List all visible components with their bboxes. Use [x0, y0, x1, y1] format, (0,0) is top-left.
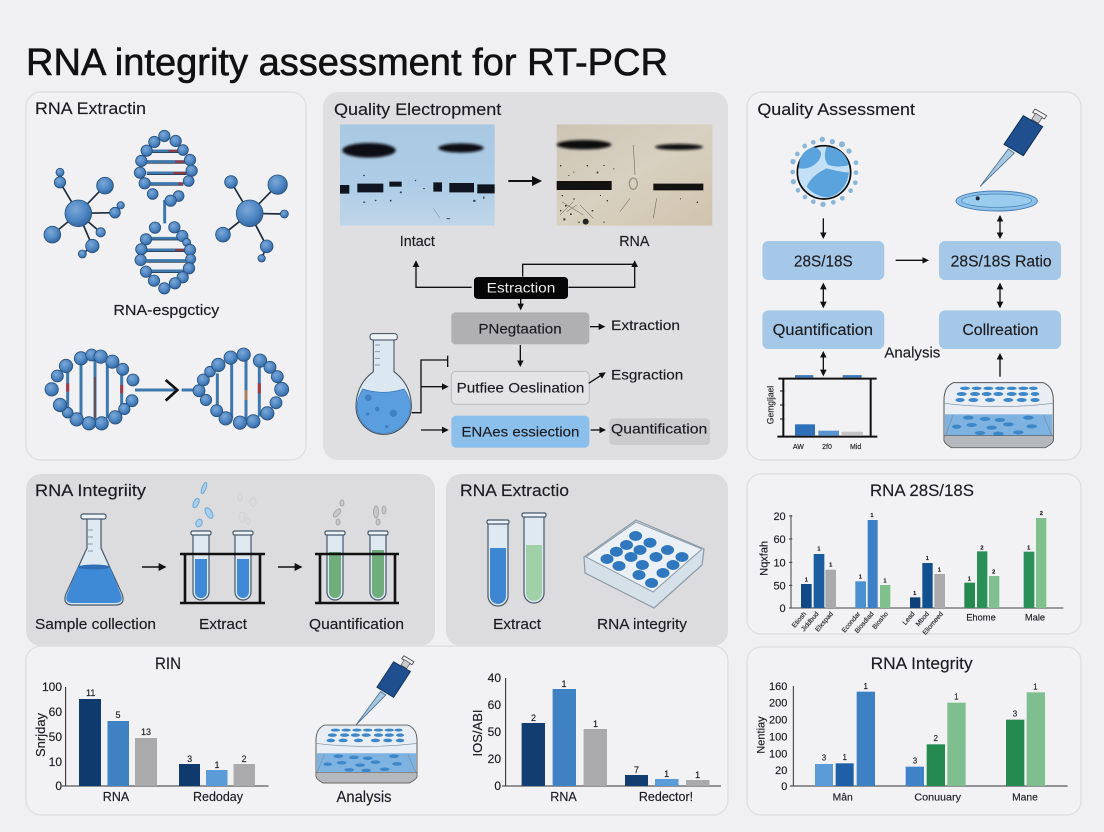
icon: vertical double helix [134, 130, 197, 294]
right bar chart: 2 [531, 713, 536, 723]
right bar chart: 7 [634, 765, 639, 775]
rotated category labels: Eliomeed [922, 611, 945, 637]
left bar chart [33, 680, 268, 804]
panel content [757, 100, 1061, 451]
y tick labels: 20 [773, 511, 786, 523]
icon: conical flask [65, 514, 123, 605]
bars [801, 518, 1046, 608]
icon: blue test tube [487, 520, 509, 606]
bar value labels: 1 [926, 556, 929, 562]
RIN heading: RIN [155, 654, 181, 673]
label: extraction: Extraction [611, 317, 680, 333]
arrow [998, 354, 1002, 377]
rotated category labels: Lead [902, 611, 917, 627]
y tick labels: 200 [769, 715, 787, 727]
arrow: extraction to RNA [523, 262, 635, 287]
box: quantification: Quantification [773, 322, 873, 339]
panel content [334, 100, 712, 448]
panel: RIN charts and analysis [26, 646, 728, 815]
label: quantification [609, 418, 710, 445]
left bar chart: Snrjday [33, 712, 48, 757]
left bar chart: 10 [49, 755, 62, 769]
bar value labels: 2 [1040, 511, 1043, 517]
tan gel image [557, 124, 712, 226]
rotated category labels: Elxspad [814, 611, 835, 633]
arrow: cell to ratio box [821, 218, 825, 238]
small bar chart: Mid [850, 444, 861, 451]
arrow [518, 345, 522, 366]
bar chart [755, 654, 1068, 803]
bar value labels: 2 [980, 545, 984, 551]
bar value labels: 1 [1027, 545, 1030, 551]
right bar chart: 1 [695, 770, 700, 780]
y tick labels: 100 [769, 732, 787, 744]
box: negotiation [451, 312, 589, 344]
rotated category labels: Biosdiad [854, 611, 876, 635]
small bar chart: AW [793, 444, 804, 451]
icon: right horizontal helix [193, 348, 289, 429]
arrow [589, 373, 605, 383]
panel: RNA integrity workflow [26, 474, 435, 646]
box: negotiation: PNegtaation [478, 320, 562, 336]
y tick labels: 60 [773, 534, 786, 546]
panel heading: Quality Assessment [757, 100, 915, 119]
small bar chart: 2f0 [822, 444, 832, 451]
icon: dish [956, 191, 1037, 211]
label: RNA: RNA [619, 234, 650, 250]
left bar chart: RNA [103, 790, 130, 804]
box: purification: Putfiee Oeslination [457, 379, 584, 395]
panel: RNA 28S/18S chart [747, 474, 1081, 637]
box: quantification [762, 310, 884, 349]
chart title: RNA Integrity [871, 654, 973, 673]
chart title: RNA 28S/18S [870, 481, 974, 500]
panel heading: RNA Extractin [35, 99, 146, 118]
icon: right molecule [216, 175, 288, 262]
icon: rack with green tubes [315, 500, 399, 603]
bar value labels: 3 [822, 754, 827, 763]
arrow [821, 352, 825, 375]
left bar chart: 50 [49, 730, 62, 744]
left bar chart: Redoday [193, 790, 244, 804]
bar value labels: 2 [992, 569, 995, 575]
icon: left molecule [44, 168, 124, 258]
rotated category labels [791, 610, 945, 637]
bar value labels: 1 [863, 682, 868, 691]
axes [790, 686, 1068, 786]
label: extract: Extract [493, 616, 542, 633]
bar chart: Mane [1012, 792, 1038, 803]
box: correlation: Collreation [962, 322, 1038, 339]
icon: sample tray [944, 383, 1053, 448]
right bar chart: RNA [550, 790, 577, 804]
icon: sample tray [316, 725, 417, 783]
bars [815, 692, 1045, 786]
bar chart [759, 481, 1063, 637]
y tick labels [773, 511, 786, 615]
y tick labels [769, 681, 787, 793]
icon: cell [790, 137, 858, 207]
arrow: dish to ratio box [998, 216, 1002, 238]
box: 28S/18S: 28S/18S [794, 254, 853, 271]
label: analysis: Analysis [884, 346, 940, 362]
label: extract: Extract [199, 616, 248, 633]
bar value labels: 1 [968, 577, 971, 583]
caption: RNA-espgcticy [113, 302, 220, 319]
bar chart: Male [1025, 613, 1045, 623]
right bar chart: 40 [488, 671, 501, 685]
small bar chart [765, 376, 877, 451]
connector: flask to boxes [412, 356, 448, 430]
y tick labels: 100 [769, 748, 787, 760]
left bar chart: 0 [55, 779, 62, 793]
left bar chart: 1 [214, 760, 220, 770]
bar value labels: 1 [829, 563, 832, 569]
right bar chart: 1 [561, 679, 567, 689]
right bar chart: IOS/ABI [470, 710, 485, 756]
left bar chart: 2 [241, 754, 247, 764]
category labels: Mân [833, 792, 853, 803]
arrow [896, 258, 928, 262]
left bar chart: 100 [42, 680, 62, 694]
left bar chart: 5 [115, 710, 121, 720]
bar value labels: 1 [1033, 683, 1038, 692]
label: quantification: Quantification [611, 420, 707, 436]
arrow [591, 428, 605, 432]
y axis label: Nentiay [755, 716, 767, 754]
label: RNA integrity: RNA integrity [597, 616, 687, 633]
right bar chart: 60 [488, 698, 501, 712]
left bar chart: 11 [86, 688, 95, 698]
rotated category labels: Econdar [841, 610, 863, 634]
box: purification [451, 371, 589, 404]
rotated category labels: Jiddbud [800, 611, 821, 633]
box: enzyme selection [451, 416, 589, 448]
label: esgraction: Esgraction [611, 367, 683, 383]
panel: quality electrophoresis [323, 92, 728, 460]
right bar chart: 1 [593, 719, 598, 729]
panel: RNA integrity chart [747, 647, 1081, 815]
box: correlation [939, 310, 1061, 349]
bar value labels [805, 511, 1043, 597]
y tick labels: 20 [775, 765, 787, 777]
label: analysis: Analysis [336, 789, 392, 806]
left bar chart: 13 [141, 727, 151, 737]
y tick labels: 160 [769, 681, 787, 693]
box: extraction: Estraction [487, 279, 555, 295]
right bar chart: 20 [488, 752, 501, 766]
arrow: helix transition [135, 380, 195, 401]
small bar chart: Gemgljael [765, 386, 775, 424]
arrow: gel comparison [508, 178, 540, 184]
arrow [821, 284, 825, 307]
rotated category labels: Biosho [871, 611, 890, 631]
arrow [998, 284, 1002, 307]
icon: green test tube [522, 513, 546, 603]
arrow [519, 299, 523, 309]
icon: well plate [584, 520, 704, 608]
right bar chart: 1 [664, 769, 669, 779]
bar value labels: 3 [1013, 710, 1018, 719]
box: 28S/18S ratio: 28S/18S Ratio [951, 254, 1052, 271]
box: 28S/18S [762, 241, 884, 280]
y tick labels: 0 [780, 603, 786, 615]
category labels: Ehome [966, 613, 996, 623]
panel: RNA extraction tubes [446, 474, 728, 646]
bar value labels: 1 [817, 547, 821, 553]
left bar chart: 3 [187, 754, 192, 764]
bar value labels: 1 [954, 693, 959, 702]
y tick labels: 200 [769, 698, 787, 710]
label: sample collection: Sample collection [35, 616, 156, 633]
panel heading: Quality Electropment [334, 100, 502, 119]
bar value labels: 1 [859, 575, 862, 581]
title: RNA integrity assessment for RT-PCR [26, 42, 668, 84]
bar value labels: 1 [938, 567, 941, 573]
bar value labels: 3 [913, 756, 918, 765]
right bar chart [470, 671, 721, 804]
y tick labels: 10 [773, 557, 786, 569]
bar value labels [822, 682, 1038, 765]
right bar chart: 50 [488, 725, 501, 739]
panel: quality assessment [747, 92, 1081, 460]
y tick labels: 0 [781, 781, 787, 793]
box: extraction [474, 277, 568, 299]
icon: rack with blue tubes [180, 482, 265, 603]
axes [789, 515, 1063, 608]
panel heading: RNA Integriity [35, 481, 147, 500]
left bar chart: 60 [49, 705, 62, 719]
arrow: extraction to intact [416, 262, 472, 287]
bar chart: Conuuary [914, 792, 962, 803]
arrow [278, 566, 301, 568]
bar value labels: 1 [883, 578, 887, 584]
bar value labels: 1 [913, 591, 916, 597]
icon: round flask [356, 334, 411, 434]
box: enzyme selection: ENAes essiection [461, 424, 579, 440]
arrow [142, 566, 165, 568]
icon: left horizontal helix [45, 349, 139, 430]
blue gel image [340, 124, 495, 226]
right bar chart: 0 [494, 779, 501, 793]
icon: pipette [356, 656, 414, 725]
label: quantification: Quantification [309, 616, 404, 633]
panel: RNA extraction [26, 92, 306, 460]
rotated category labels: Etiosh [791, 611, 808, 629]
molecules and helices artwork [44, 130, 289, 430]
bar value labels: 1 [842, 753, 847, 762]
bar value labels: 2 [933, 734, 938, 743]
bar value labels: 1 [870, 513, 874, 519]
right bar chart: Redector! [639, 790, 693, 804]
box: 28S/18S ratio [939, 241, 1061, 280]
y tick labels: 50 [773, 580, 786, 592]
arrow [590, 325, 604, 329]
bar value labels: 1 [805, 578, 808, 584]
rotated category labels: Mbod [915, 611, 931, 628]
label: intact: Intact [400, 234, 435, 250]
panel heading: RNA Extractio [460, 481, 569, 500]
y axis label: Nqxfah [759, 541, 771, 576]
icon: pipette [980, 109, 1047, 187]
